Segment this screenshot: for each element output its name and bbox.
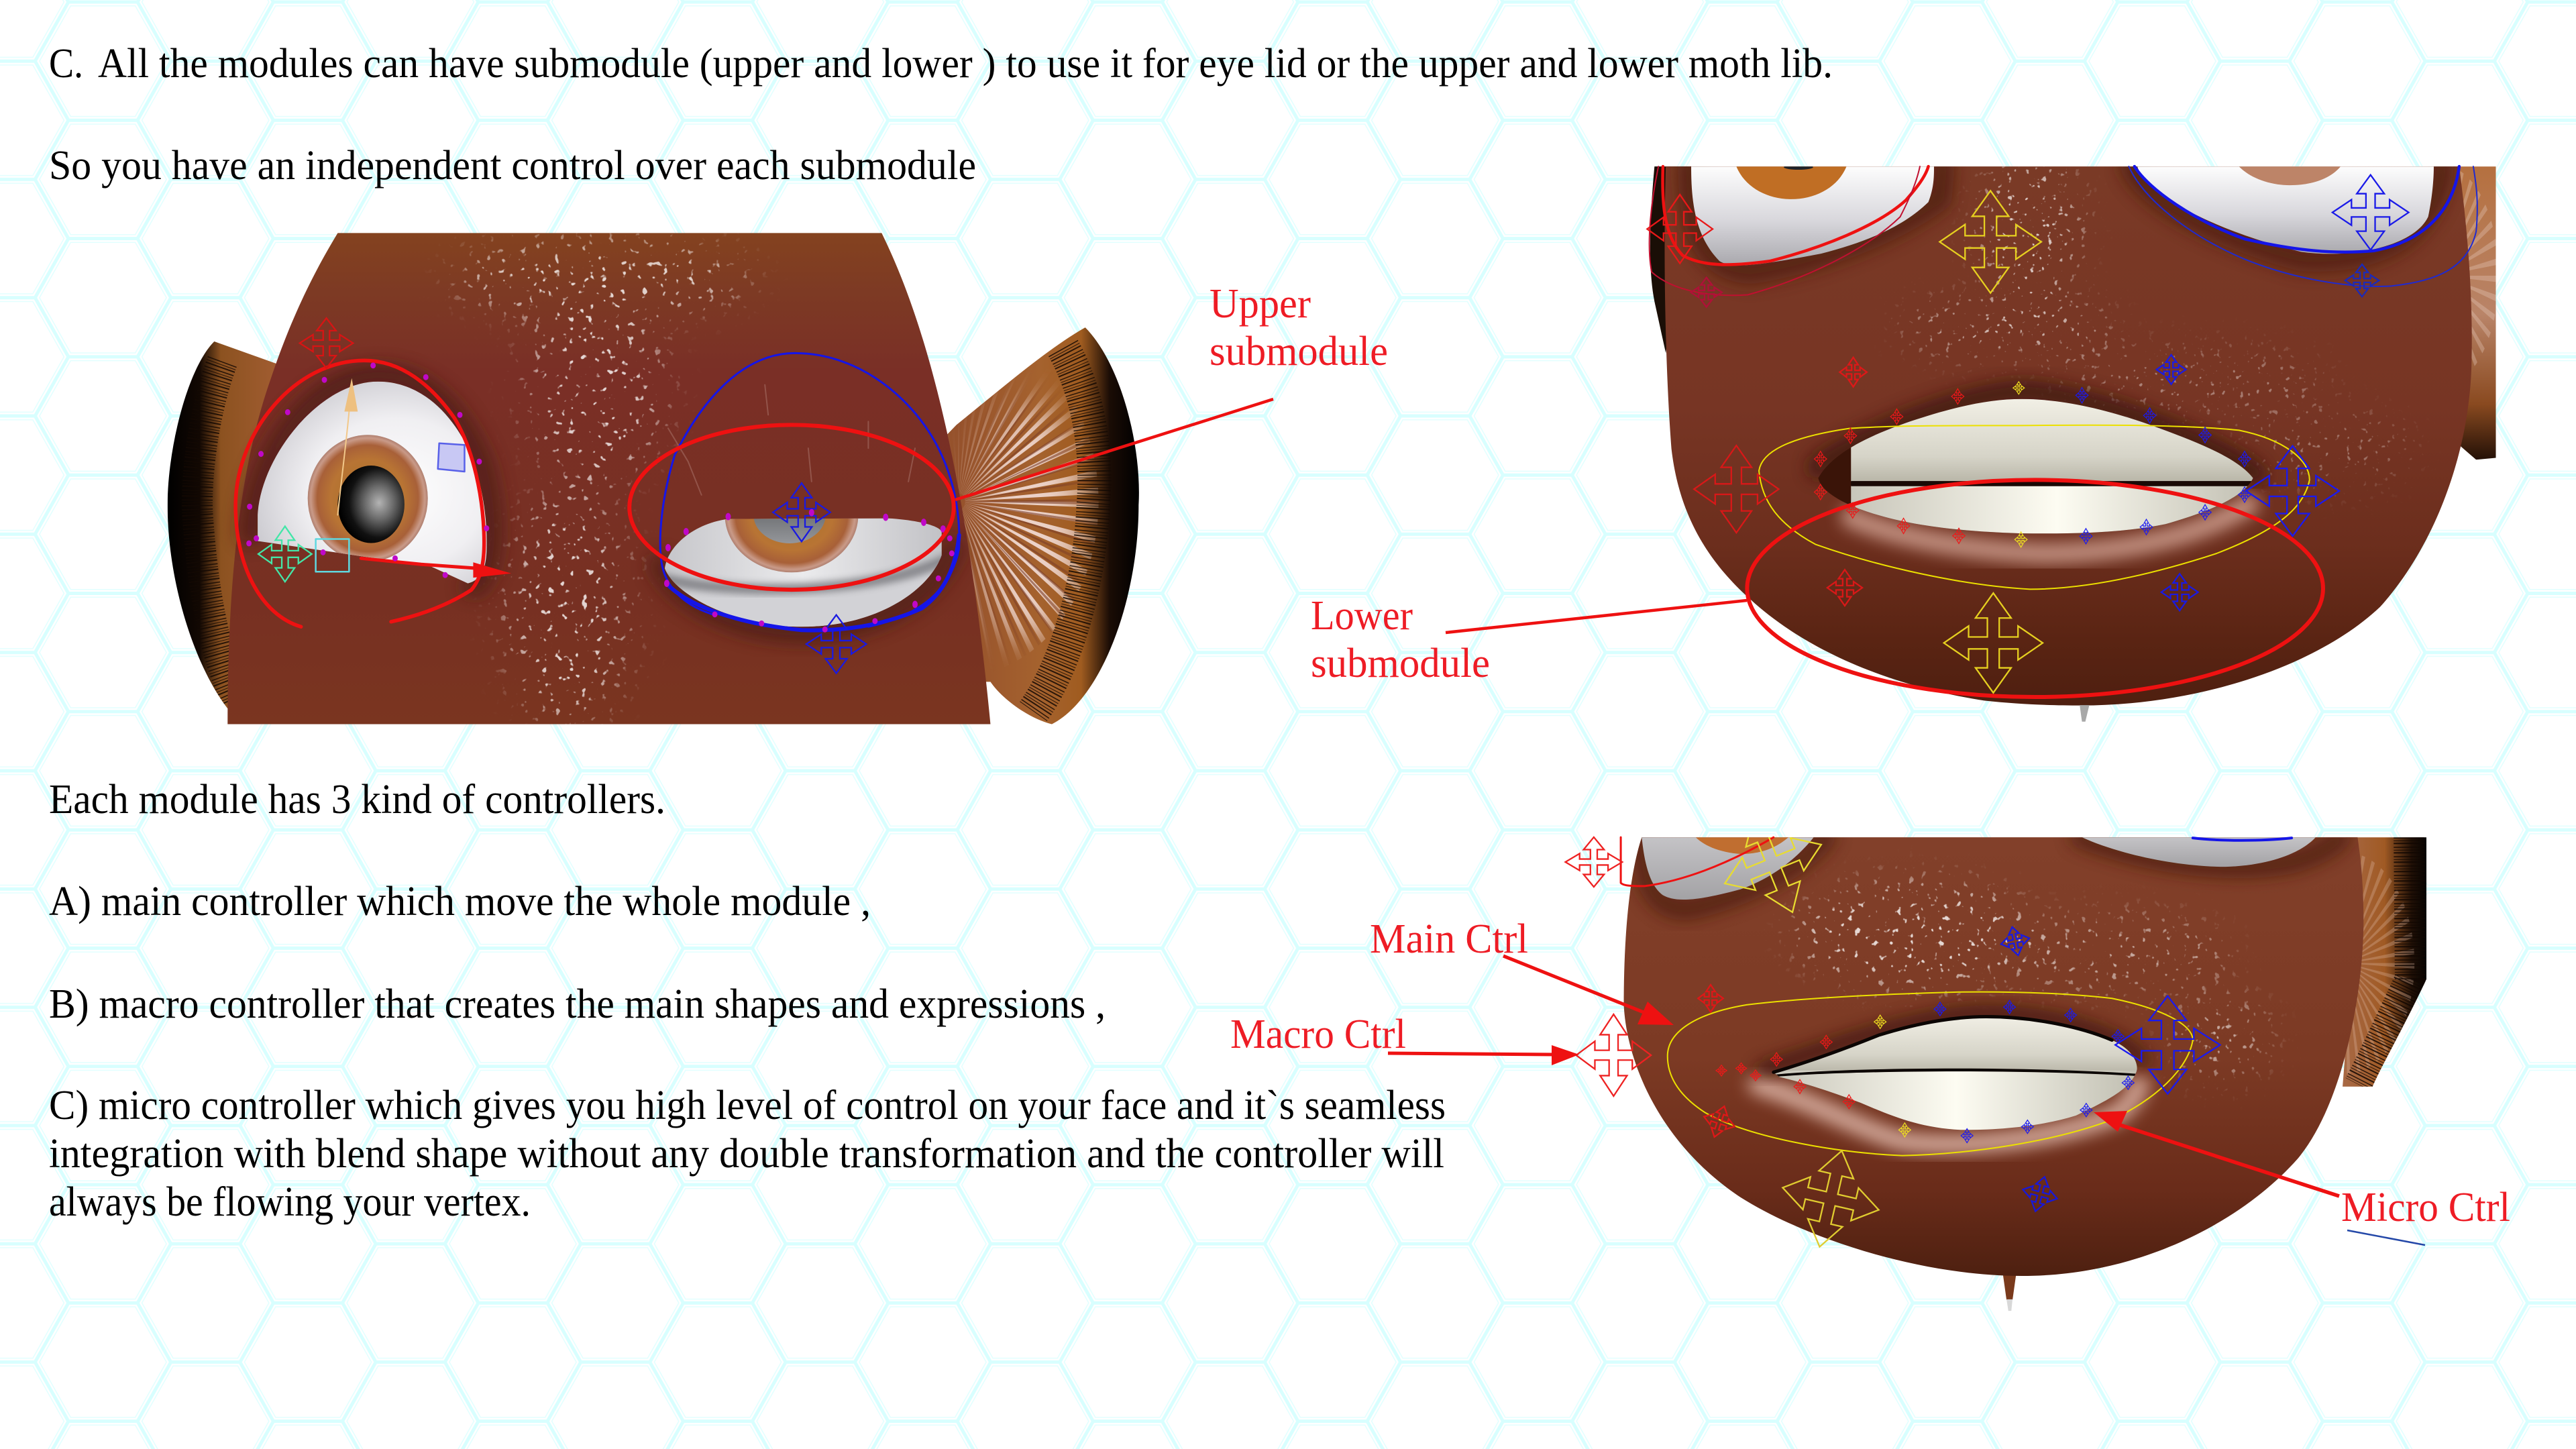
skin speckles [1624,837,2367,1142]
right eye lash highlights [668,385,915,495]
eye rig fragments [1621,837,2292,886]
arrow: micro ctrl [2094,1111,2339,1196]
mouth [1815,397,2263,537]
left iris [308,435,428,561]
panel: eyes render with upper and lower submodule [161,233,1145,729]
panel: mouth render with lower submodule [1647,164,2499,722]
left eye rig curve [235,360,511,627]
right eye white [2137,166,2434,254]
right eye socket shadow [661,548,952,632]
label: lower submodule [1311,593,1490,686]
red cross control [300,318,353,368]
upper teeth [1851,397,2263,482]
left pupil sliver [1784,164,1813,170]
eye rig curves [1650,166,2477,295]
head skin [1664,166,2473,706]
label: upper submodule: submodule [1210,329,1388,374]
label: upper submodule: Upper [1210,281,1311,327]
left eye socket shadow [251,375,490,587]
label: micro ctrl: Micro Ctrl [2341,1185,2510,1230]
right eye [665,518,942,627]
upper teeth [1770,1014,2142,1072]
upper mouth dark edge [1774,1017,2112,1072]
chin spike [2003,1275,2016,1311]
text: item B: B) macro controller that creates the main shapes and expressions , [49,981,1106,1027]
skin speckles [1666,166,2473,608]
right iris [2239,166,2341,185]
text: independent control: So you have an independent control over each submodule [49,143,976,189]
right eye blue rig curve [660,353,959,631]
micro controls [1815,382,2251,547]
left eye white [1691,166,1934,265]
left eye white [1642,837,1814,900]
right ear [2310,835,2429,1088]
cross controls [1565,837,2220,1096]
left ear [168,341,276,708]
label: upper submodule [1210,281,1388,374]
left iris [1696,837,1788,854]
mouth [1770,1014,2142,1132]
green cross control [258,527,312,582]
ear radial stripes [885,410,1032,594]
lower submodule highlight ellipse [1747,480,2323,697]
translate arrow head [473,562,511,578]
arrow: main ctrl [1503,956,1674,1025]
lower eyeball below lid shadow [672,562,938,627]
micro controls [1716,1000,2134,1143]
label: lower submodule: Lower [1311,593,1413,639]
arrow: macro ctrl [1388,1045,1579,1065]
text: item C: integration with blend shape without any double transformation and the controller will [49,1131,1444,1177]
arrow: upper submodule leader [955,399,1273,500]
yellow module outline [1668,992,2193,1156]
text: item A: A) main controller which move the whole module , [49,879,871,924]
label: main ctrl: Main Ctrl [1370,916,1528,962]
chin tip [2080,705,2089,722]
blue selection handle [438,443,464,472]
head skin [227,233,995,724]
blue cross controls [773,483,866,674]
text: item C: always be flowing your vertex. [49,1179,531,1225]
left pupil [337,466,405,543]
left eye [258,381,487,584]
lower teeth [1770,1071,2142,1132]
label: macro ctrl: Macro Ctrl [1230,1012,1406,1057]
upper lip shadow [1818,392,2256,474]
left ear strip [1650,166,1691,353]
right iris [724,518,859,573]
macro cross controls [1647,175,2409,693]
lower lip highlight [1849,504,2250,553]
eye socket shadows [1690,166,2443,272]
right ear strip [2414,165,2499,464]
cyan selection box [316,539,349,572]
arrow: lower submodule leader [1446,600,1747,633]
panel: mouth render with controller types [1565,835,2429,1311]
head skin [1624,837,2367,1276]
lower teeth [1851,486,2263,537]
teeth gap line [1851,481,2263,486]
text: heading line C: C. [49,41,83,87]
micro control dots [246,362,955,633]
yellow module outline [1759,425,2310,589]
text: item C: C) micro controller which gives you high level of control on your face and it`s seamless [49,1083,1446,1128]
teeth gap line [1774,1069,2137,1077]
skin speckles [431,233,767,724]
micro ctrl underline [2347,1230,2425,1245]
rotated cross controls on controller panel [1699,796,2061,1258]
eye socket shadows [1642,837,2340,909]
lower lid red line [361,558,478,568]
lid shadow band [661,560,945,589]
label: lower submodule: submodule [1311,641,1490,686]
aim cone [337,378,358,515]
upper lip shadow [1764,1013,2142,1069]
right eye white [2082,837,2316,867]
right ear [947,327,1139,724]
text: heading line C: All the modules can have submodule (upper and lower ) to use it for eye lid or the upper and lower moth lib. [98,41,1833,87]
right pupil [754,519,825,543]
left iris [1736,166,1847,199]
text: item C [49,1083,1446,1225]
upper submodule highlight ellipse [629,425,954,590]
text: three kinds of controllers: Each module has 3 kind of controllers. [49,777,665,822]
lower lip highlight [1758,1085,2139,1144]
